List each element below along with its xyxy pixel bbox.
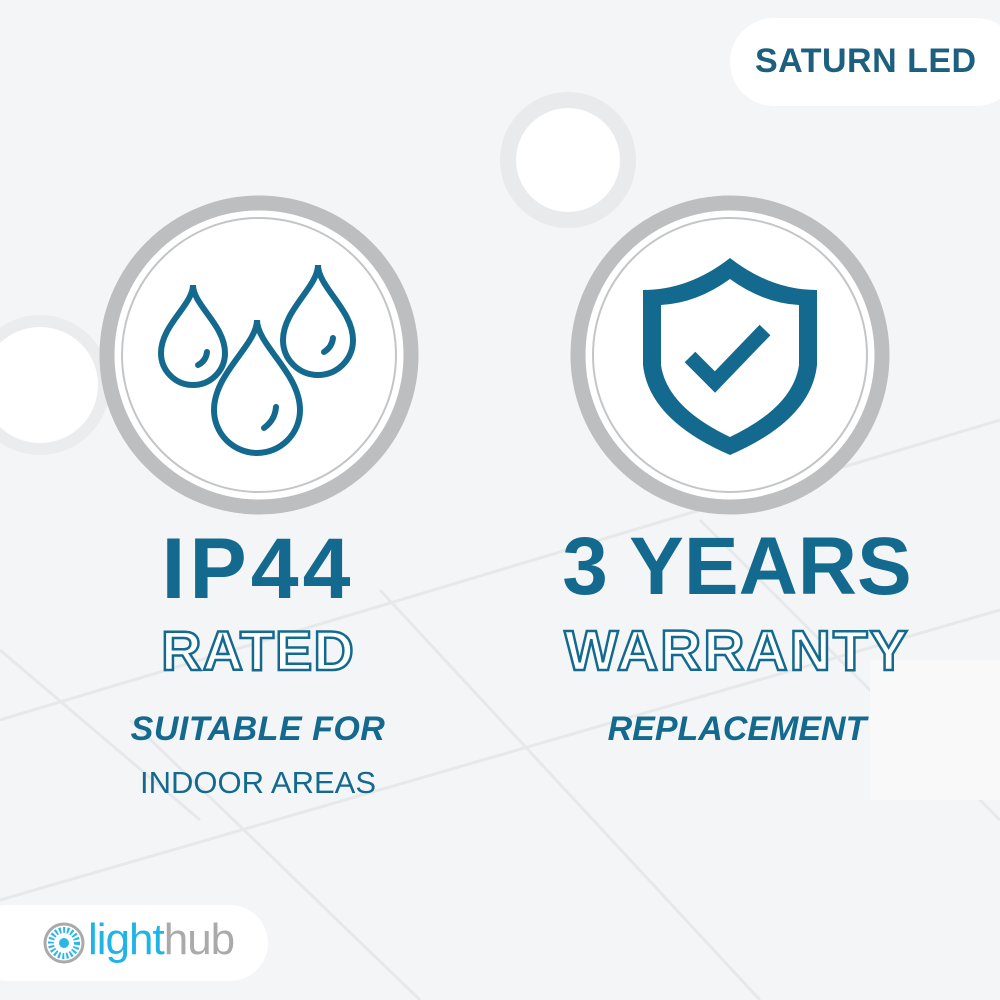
badge: Saturn LED: SATURN LED (755, 42, 977, 80)
logo: lighthub: lighthub (88, 915, 234, 964)
icon: water drops circle (100, 196, 418, 514)
text: indoor areas: INDOOR AREAS (140, 765, 376, 800)
text: replacement: REPLACEMENT (608, 710, 866, 748)
text: 3 YEARS: 3 YEARS (562, 521, 912, 612)
text: suitable for: SUITABLE FOR (131, 710, 385, 748)
logo: lighthub (0, 905, 268, 981)
badge: Saturn LED (730, 18, 1000, 106)
text: WARRANTY: WARRANTY (564, 619, 910, 683)
text: RATED: RATED (161, 619, 355, 682)
icon: shield circle (570, 196, 890, 514)
text: IP44: IP44 (162, 521, 354, 617)
